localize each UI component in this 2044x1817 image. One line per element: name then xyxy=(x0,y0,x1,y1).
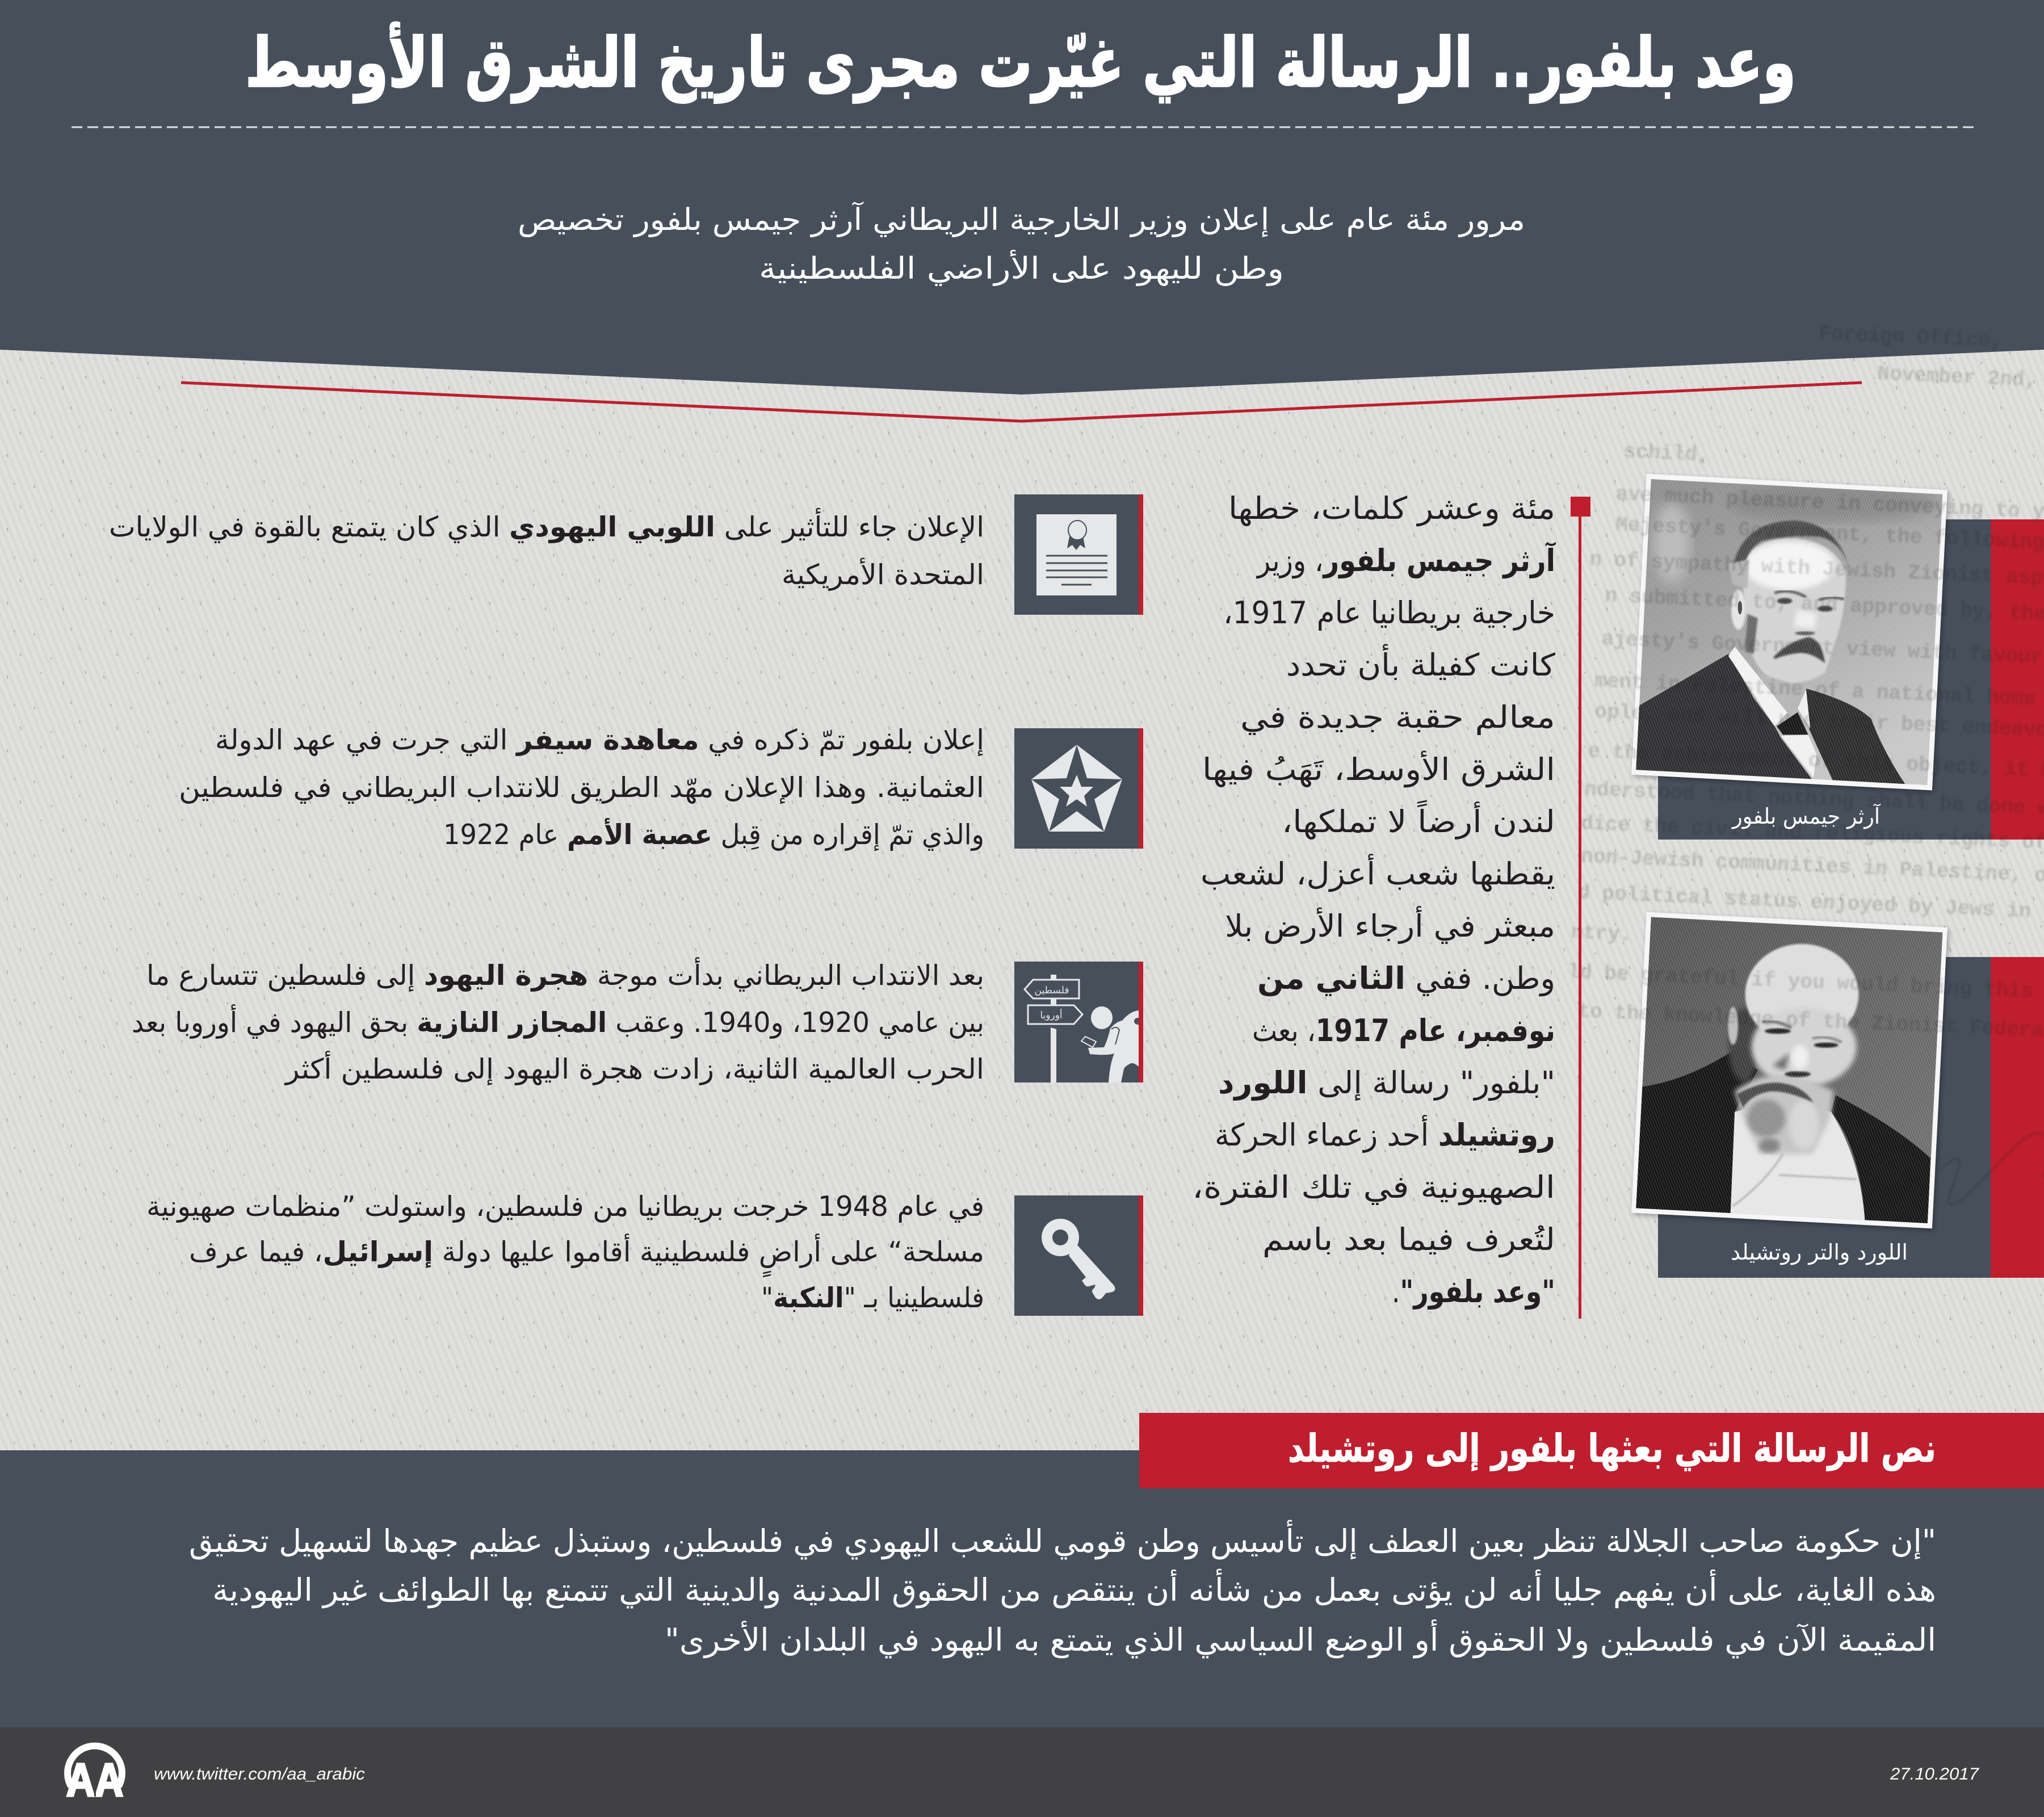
text: Sevres treaty: والذي تمّ إقراره من قِبل عصبة الأمم عام 1922 xyxy=(443,817,984,851)
footer bar xyxy=(0,1727,2044,1817)
faded letter text: ld be grateful if you would bring this xyxy=(1567,960,2033,1003)
red chevron line xyxy=(181,383,1862,421)
photo: Lord Walter Rothschild xyxy=(1631,912,1949,1231)
text: Sevres treaty xyxy=(179,724,984,851)
faded letter text xyxy=(1567,322,2044,1205)
main narrative text: كانت كفيلة بأن تحدد xyxy=(1286,644,1555,683)
text: Nakba: مسلحة“ على أراضٍ فلسطينية أقاموا عليها دولة إسرائيل، فيما عرف xyxy=(189,1233,984,1278)
text: Nakba xyxy=(146,1190,984,1314)
subtitle: وطن لليهود على الأراضي الفلسطينية xyxy=(759,250,1284,286)
icon: migrant at signpost: أوروبا xyxy=(1040,1009,1063,1021)
text: lobby: المتحدة الأمريكية xyxy=(782,557,984,591)
text: lobby: الإعلان جاء للتأثير على اللوبي اليهودي الذي كان يتمتع بالقوة في الولايات xyxy=(109,507,984,543)
faded letter text: schild, xyxy=(1623,440,1710,467)
text: Jewish migration: بين عامي 1920، و1940. وعقب المجازر النازية بحق اليهود في أوروبا بعد xyxy=(132,1004,984,1039)
text: Sevres treaty: إعلان بلفور تمّ ذكره في معاهدة سيفر التي جرت في عهد الدولة xyxy=(215,724,984,757)
main narrative text: وطن. ففي الثاني من xyxy=(1257,960,1555,996)
text: Jewish migration: بعد الانتداب البريطاني بدأت موجة هجرة اليهود إلى فلسطين تتسارع ما xyxy=(146,957,984,992)
main narrative text: روتشيلد أحد زعماء الحركة xyxy=(1215,1115,1555,1153)
timeline marker xyxy=(1571,497,1590,1319)
main narrative text: آرثر جيمس بلفور، وزير xyxy=(1256,542,1556,578)
main narrative text: مبعثر في أرجاء الأرض بلا xyxy=(1225,906,1555,944)
main narrative text: يقطنها شعب أعزل، لشعب xyxy=(1201,854,1555,892)
text: Jewish migration: الحرب العالمية الثانية، زادت هجرة اليهود إلى فلسطين أكثر xyxy=(284,1051,984,1086)
footer date: 27.10.2017 xyxy=(1890,1765,1979,1784)
main narrative text: معالم حقبة جديدة في xyxy=(1240,699,1555,735)
main narrative text: لندن أرضاً لا تملكها، xyxy=(1282,800,1555,840)
panel: Rothschild backing xyxy=(1658,957,2044,1278)
footer link: www.twitter.com/aa_arabic xyxy=(154,1765,365,1784)
icon: certificate xyxy=(1014,494,1143,615)
letter text: "إن حكومة صاحب الجلالة تنظر بعين العطف إلى تأسيس وطن قومي للشعب اليهودي في فلسطين، وستبذل عظيم جهدها لتسهيل تحقيق xyxy=(189,1520,1936,1560)
main narrative text: لتُعرف فيما بعد باسم xyxy=(1262,1222,1555,1257)
main narrative text: الصهيونية في تلك الفترة، xyxy=(1192,1169,1555,1205)
main narrative text: "وعد بلفور". xyxy=(1392,1274,1555,1310)
photo: Arthur James Balfour xyxy=(1631,473,1949,792)
caption: Rothschild: اللورد والتر روتشيلد xyxy=(1731,1240,1908,1265)
main narrative text: "بلفور" رسالة إلى اللورد xyxy=(1218,1065,1555,1101)
faded letter text: Majesty's Government, the following xyxy=(1615,513,2044,555)
icon: key xyxy=(1014,1195,1143,1316)
text: Nakba: فلسطينيا بـ "النكبة" xyxy=(761,1282,984,1314)
icon: migrant at signpost xyxy=(1014,962,1143,1082)
main narrative text xyxy=(1192,490,1556,1310)
main narrative text: خارجية بريطانيا عام 1917، xyxy=(1223,595,1555,631)
main narrative text: الشرق الأوسط، تَهَبُ فيها xyxy=(1202,750,1555,787)
faded letter text: ntry. xyxy=(1571,921,1632,947)
subtitle xyxy=(518,202,1525,286)
header band xyxy=(0,0,2044,395)
text: lobby xyxy=(109,507,984,591)
panel: Balfour backing xyxy=(1658,519,2044,840)
icon: migrant at signpost: فلسطين xyxy=(1035,985,1069,996)
text: Jewish migration xyxy=(132,957,984,1086)
letter panel background xyxy=(0,1450,2044,1727)
text: Sevres treaty: العثمانية. وهذا الإعلان مهّد الطريق للانتداب البريطاني في فلسطين xyxy=(179,771,984,804)
logo: AA: AA xyxy=(66,1755,123,1806)
letter text xyxy=(189,1520,1936,1659)
text: Nakba: في عام 1948 خرجت بريطانيا من فلسطين، واستولت ”منظمات صهيونية xyxy=(146,1190,984,1223)
faded letter text: dice the civil and religious rights of xyxy=(1581,812,2044,854)
main narrative text: مئة وعشر كلمات، خطها xyxy=(1228,490,1555,526)
letter text: هذه الغاية، على أن يفهم جليا أنه لن يؤتى بعمل من شأنه أن ينتقص من الحقوق المدنية والدينية التي تتمتع بها الطوائف غير اليهودية xyxy=(212,1568,1936,1609)
icon: star pentagon xyxy=(1014,728,1143,849)
subtitle: مرور مئة عام على إعلان وزير الخارجية البريطاني آرثر جيمس بلفور تخصيص xyxy=(518,202,1525,237)
caption: Balfour: آرثر جيمس بلفور xyxy=(1731,803,1881,829)
letter heading xyxy=(1139,1413,2044,1488)
main narrative text: نوفمبر، عام 1917، بعث xyxy=(1252,1013,1555,1048)
letter text: المقيمة الآن في فلسطين ولا الحقوق أو الوضع السياسي الذي يتمتع به اليهود في البلدان الأخرى" xyxy=(665,1619,1936,1659)
faded letter text: Foreign Office, xyxy=(1819,322,2003,353)
